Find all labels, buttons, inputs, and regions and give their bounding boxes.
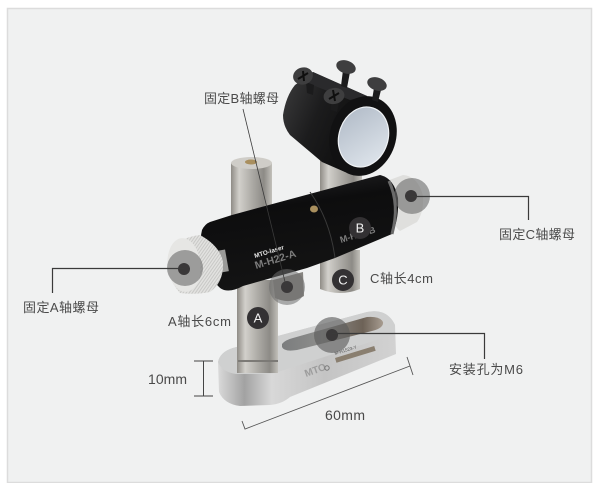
badge C [332,269,354,291]
shaft upper right [320,160,362,202]
label: fix C nut: 固定C轴螺母 [499,227,575,242]
badge A: A [254,310,263,326]
badge B [349,217,371,239]
shaft A [237,280,278,373]
screws [291,58,389,112]
mounting base: M-H1523-Y [334,344,357,356]
main black body: M-H22-A [253,248,298,272]
dimension: 60mm line [242,357,413,429]
left knob [165,235,229,294]
product: laser mount [165,58,423,406]
dimension: 10mm bracket [194,361,213,396]
badge B: B [356,220,364,236]
mounting base [218,311,396,406]
shaft C lower [320,250,360,293]
marker: fix C nut with leader [394,178,528,220]
label: C shaft length: C轴长4cm [370,271,433,286]
lower bolt [273,272,304,301]
main black body: M-H22-B [339,225,377,245]
main black body [201,175,398,290]
label: mounting hole: 安装孔为M6 [449,362,523,377]
label: 60mm: 60mm [325,407,365,423]
label: 10mm: 10mm [148,371,187,387]
mounting base: MTO [303,362,328,380]
badge A [247,307,269,329]
marker: mounting hole with leader [314,317,484,359]
marker: fix B nut with leader [243,109,305,305]
marker: fix A nut with leader [52,250,203,293]
label: fix A nut: 固定A轴螺母 [23,300,99,315]
badge C: C [338,272,348,288]
laser holder [283,58,407,185]
shaft upper left [231,157,272,225]
label: A shaft length: A轴长6cm [168,314,231,329]
label: fix B nut: 固定B轴螺母 [204,91,279,106]
right knob [384,175,423,231]
main black body: MTO-laser [254,244,285,260]
